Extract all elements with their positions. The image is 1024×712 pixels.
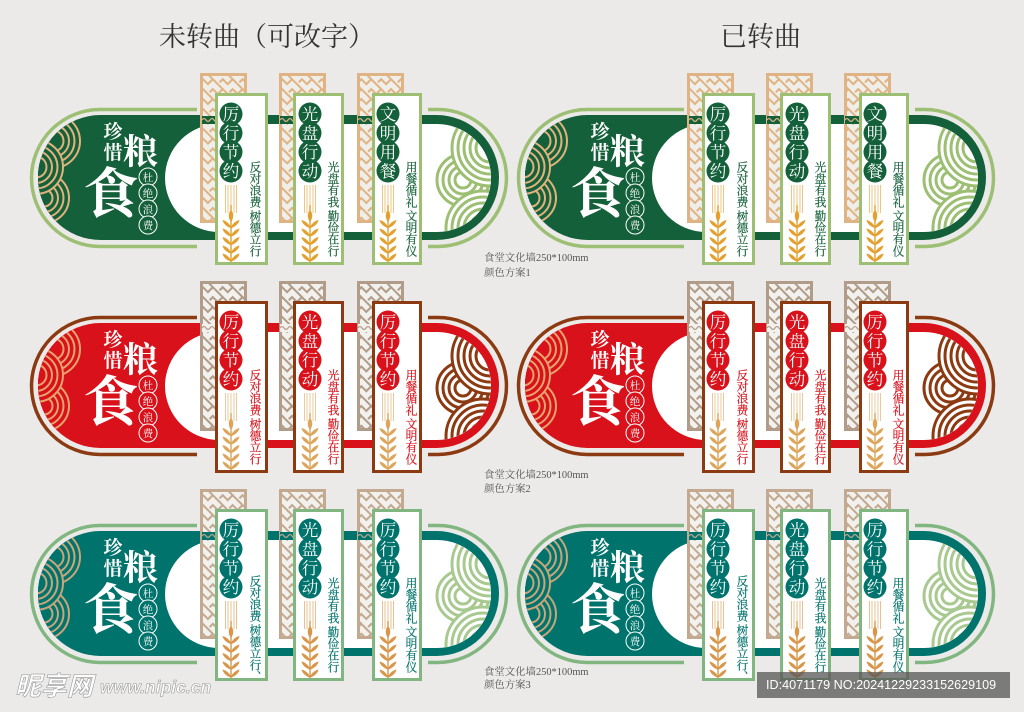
card: 厉行节约 second: 用餐循礼	[892, 577, 904, 624]
card: 厉行节约: 树德立行	[736, 417, 748, 465]
title block: 费	[630, 427, 641, 440]
title block	[83, 537, 158, 650]
card: 光盘行动: 动	[789, 578, 805, 597]
card: 厉行节约: 行	[223, 124, 239, 143]
card: 厉行节约 second: 厉	[380, 521, 396, 540]
title block: 浪	[143, 203, 154, 216]
card: 厉行节约 second	[374, 510, 420, 680]
title block: 珍	[103, 329, 123, 351]
card: 厉行节约: 约	[223, 370, 239, 389]
card: 厉行节约 second	[374, 302, 420, 472]
card: 光盘行动: 行	[302, 559, 318, 578]
card: 厉行节约 second: 行	[867, 540, 883, 559]
title block: 粮	[123, 341, 158, 380]
caption: colour scheme 1: 颜色方案1	[484, 266, 531, 279]
caption: colour scheme 3: 颜色方案3	[484, 678, 531, 691]
card: 文明用餐: 用餐循礼	[404, 161, 418, 208]
card: 文明用餐: 文明有仪	[892, 210, 904, 257]
card: 厉行节约: 树德立行	[248, 417, 262, 465]
card: 光盘行动: 光盘有我	[326, 576, 340, 624]
card: 厉行节约: 反对浪费	[248, 575, 262, 622]
title block: 浪	[630, 411, 641, 424]
card: 厉行节约: 反对浪费	[736, 161, 748, 208]
card: 光盘行动: 光盘有我	[814, 160, 826, 208]
caption: colour scheme 2: 食堂文化墙250*100mm	[484, 468, 588, 481]
card: 厉行节约 second	[860, 302, 908, 472]
card: 厉行节约: 厉	[223, 105, 239, 124]
card: 光盘行动: 盘	[789, 332, 805, 351]
card: 厉行节约: 行	[223, 332, 239, 351]
card: 光盘行动: 勤俭在行	[814, 417, 826, 465]
title block: 食	[83, 372, 139, 433]
title block: 珍	[103, 121, 123, 143]
card: 厉行节约: 节	[710, 143, 726, 162]
caption: colour scheme 3: 食堂文化墙250*100mm	[484, 665, 588, 678]
card: 厉行节约: 行	[710, 540, 726, 559]
title block	[570, 121, 645, 234]
title block: 珍	[590, 537, 610, 559]
card: 厉行节约: 节	[710, 559, 726, 578]
watermark: site logo: www.nipic.cn	[100, 677, 211, 697]
card: 光盘行动	[294, 302, 342, 472]
card: 厉行节约 second: 行	[380, 332, 396, 351]
card: 文明用餐: 文	[867, 105, 883, 124]
card: 厉行节约: 厉	[223, 521, 239, 540]
card: 厉行节约 second: 厉	[867, 521, 883, 540]
title block: 费	[143, 427, 154, 440]
lattice panels	[202, 282, 402, 430]
card: 厉行节约: 行	[710, 332, 726, 351]
title block: 杜	[630, 587, 641, 600]
card: 光盘行动: 光	[789, 521, 805, 540]
card: 光盘行动: 行	[302, 143, 318, 162]
title block: 惜	[103, 142, 123, 164]
title block: 惜	[590, 350, 610, 372]
lattice panels	[688, 282, 890, 430]
card: 厉行节约 second: 厉	[867, 313, 883, 332]
panel: green wall, editable	[9, 74, 528, 265]
title block	[570, 537, 645, 650]
card: 厉行节约 second: 节	[380, 559, 396, 578]
card: 文明用餐: 明	[380, 124, 396, 143]
card: 光盘行动: 勤俭在行	[326, 417, 340, 465]
card: 厉行节约	[704, 510, 754, 682]
card: 厉行节约 second: 节	[867, 559, 883, 578]
card: 光盘行动: 行	[789, 559, 805, 578]
card: 厉行节约: 树德立行、	[736, 623, 748, 682]
card: 光盘行动: 勤俭在行	[326, 625, 340, 673]
card: 光盘行动: 盘	[789, 124, 805, 143]
card: 光盘行动: 勤俭在行	[814, 625, 826, 673]
panel: red wall, editable	[9, 282, 528, 473]
card: 文明用餐: 餐	[380, 162, 396, 181]
title block: 费	[630, 219, 641, 232]
title block: 绝	[630, 604, 641, 616]
card: 光盘行动: 盘	[302, 332, 318, 351]
panel: green wall, outlined	[496, 74, 1015, 265]
card: 厉行节约: 树德立行	[248, 209, 262, 257]
card: 光盘行动: 勤俭在行	[814, 209, 826, 257]
card: 厉行节约	[216, 94, 266, 264]
card: 厉行节约: 约	[710, 578, 726, 597]
card: 厉行节约: 树德立行、	[248, 623, 262, 682]
card: 光盘行动	[782, 94, 830, 264]
title block: 浪	[630, 203, 641, 216]
title block: 食	[83, 164, 139, 225]
card: 光盘行动: 光	[789, 105, 805, 124]
title block	[83, 329, 158, 442]
card: 光盘行动: 行	[302, 351, 318, 370]
card: 厉行节约: 约	[710, 162, 726, 181]
card: 厉行节约 second: 约	[867, 370, 883, 389]
card: 厉行节约	[216, 302, 266, 472]
card: 光盘行动	[294, 510, 342, 680]
card: 厉行节约 second: 文明有仪	[892, 626, 904, 673]
title block: 珍	[103, 537, 123, 559]
card: 光盘行动: 行	[789, 143, 805, 162]
title block: 杜	[143, 379, 154, 392]
card: 光盘行动	[782, 302, 830, 472]
card: 光盘行动: 动	[302, 162, 318, 181]
card: 厉行节约	[704, 94, 754, 264]
title block	[83, 121, 158, 234]
card: 厉行节约: 节	[223, 351, 239, 370]
card: 厉行节约 second: 约	[380, 370, 396, 389]
card: 厉行节约 second: 用餐循礼	[404, 577, 418, 624]
card: 厉行节约 second: 文明有仪	[404, 626, 418, 673]
card: 厉行节约: 行	[710, 124, 726, 143]
card: 光盘行动: 动	[789, 370, 805, 389]
lattice panels	[688, 74, 890, 222]
title block: 绝	[143, 396, 154, 408]
card: 厉行节约 second: 节	[380, 351, 396, 370]
title block: 珍	[590, 329, 610, 351]
card: 文明用餐: 用餐循礼	[892, 161, 904, 208]
watermark: site logo: 昵享网	[15, 671, 97, 701]
card: 厉行节约 second: 行	[380, 540, 396, 559]
card: 光盘行动: 光盘有我	[326, 160, 340, 208]
card: 光盘行动	[782, 510, 830, 680]
card: 光盘行动: 盘	[302, 540, 318, 559]
card: 厉行节约: 行	[223, 540, 239, 559]
title block: 惜	[590, 558, 610, 580]
card: 厉行节约: 厉	[710, 105, 726, 124]
title block: 食	[570, 580, 626, 641]
title block: 杜	[143, 587, 154, 600]
card: 文明用餐: 用	[867, 143, 883, 162]
card: 光盘行动: 行	[789, 351, 805, 370]
card: 光盘行动	[294, 94, 342, 264]
card: 光盘行动: 动	[302, 370, 318, 389]
card: 厉行节约 second: 文明有仪	[404, 418, 418, 465]
title block: 粮	[610, 341, 645, 380]
title block: 浪	[143, 411, 154, 424]
card: 厉行节约: 节	[223, 559, 239, 578]
card: 光盘行动: 光	[302, 313, 318, 332]
title block: 食	[570, 164, 626, 225]
card: 厉行节约 second: 约	[380, 578, 396, 597]
card: 光盘行动: 光盘有我	[814, 368, 826, 416]
title block: 珍	[590, 121, 610, 143]
title block: 绝	[143, 188, 154, 200]
card: 光盘行动: 勤俭在行	[326, 209, 340, 257]
heading: editable version: 未转曲（可改字）	[159, 22, 375, 52]
card: 文明用餐	[374, 94, 420, 264]
card: 厉行节约 second: 行	[867, 332, 883, 351]
card: 光盘行动: 光	[302, 521, 318, 540]
title block: 杜	[630, 171, 641, 184]
card: 厉行节约 second: 厉	[380, 313, 396, 332]
title block: 粮	[123, 133, 158, 172]
title block: 费	[630, 635, 641, 648]
card: 厉行节约 second: 用餐循礼	[892, 369, 904, 416]
card: 厉行节约: 约	[223, 162, 239, 181]
card: 文明用餐	[860, 94, 908, 264]
title block: 杜	[143, 171, 154, 184]
card: 厉行节约: 反对浪费	[736, 369, 748, 416]
card: 厉行节约 second	[860, 510, 908, 680]
card: 光盘行动: 光	[789, 313, 805, 332]
card: 厉行节约: 反对浪费	[248, 369, 262, 416]
title block: 粮	[610, 133, 645, 172]
heading: outlined version: 已转曲	[720, 22, 801, 52]
card: 文明用餐: 用	[380, 143, 396, 162]
card: 厉行节约: 厉	[710, 313, 726, 332]
card: 厉行节约: 树德立行	[736, 209, 748, 257]
lattice panels	[202, 74, 402, 222]
title block: 粮	[610, 549, 645, 588]
lattice panels	[688, 490, 890, 638]
title block: 费	[143, 219, 154, 232]
title block: 惜	[590, 142, 610, 164]
title block: 浪	[143, 619, 154, 632]
title block: 惜	[103, 350, 123, 372]
card: 厉行节约: 厉	[710, 521, 726, 540]
card: 厉行节约: 厉	[223, 313, 239, 332]
caption: colour scheme 1: 食堂文化墙250*100mm	[484, 251, 588, 264]
title block: 费	[143, 635, 154, 648]
watermark: site logo	[15, 671, 211, 701]
card: 光盘行动: 动	[789, 162, 805, 181]
card: 文明用餐: 明	[867, 124, 883, 143]
card: 光盘行动: 光盘有我	[326, 368, 340, 416]
card: 光盘行动: 盘	[302, 124, 318, 143]
card: 光盘行动: 动	[302, 578, 318, 597]
title block: 食	[83, 580, 139, 641]
card: 厉行节约: 反对浪费	[248, 161, 262, 208]
card: 光盘行动: 光盘有我	[814, 576, 826, 624]
card: 文明用餐: 文	[380, 105, 396, 124]
card: 厉行节约: 节	[223, 143, 239, 162]
title block: 绝	[143, 604, 154, 616]
title block: 粮	[123, 549, 158, 588]
lattice panels	[202, 490, 402, 638]
card: 厉行节约: 节	[710, 351, 726, 370]
card: 厉行节约: 约	[223, 578, 239, 597]
card: 厉行节约	[704, 302, 754, 472]
card: 文明用餐: 餐	[867, 162, 883, 181]
caption: colour scheme 2: 颜色方案2	[484, 482, 531, 495]
watermark: image id	[757, 672, 1010, 698]
card: 厉行节约 second: 用餐循礼	[404, 369, 418, 416]
card: 厉行节约 second: 约	[867, 578, 883, 597]
card: 光盘行动: 盘	[789, 540, 805, 559]
card: 厉行节约: 反对浪费	[736, 575, 748, 622]
panel: teal wall, outlined	[496, 490, 1015, 682]
watermark: image id: ID:4071179 NO:20241229233152629109	[766, 678, 996, 692]
title block: 食	[570, 372, 626, 433]
card: 厉行节约	[216, 510, 266, 682]
title block: 绝	[630, 396, 641, 408]
card: 厉行节约 second: 节	[867, 351, 883, 370]
title block: 浪	[630, 619, 641, 632]
card: 厉行节约: 约	[710, 370, 726, 389]
panel: teal wall, editable	[9, 490, 528, 682]
card: 文明用餐: 文明有仪	[404, 210, 418, 257]
card: 厉行节约 second: 文明有仪	[892, 418, 904, 465]
panel: red wall, outlined	[496, 282, 1015, 473]
title block: 绝	[630, 188, 641, 200]
card: 光盘行动: 光	[302, 105, 318, 124]
title block	[570, 329, 645, 442]
title block: 杜	[630, 379, 641, 392]
title block: 惜	[103, 558, 123, 580]
